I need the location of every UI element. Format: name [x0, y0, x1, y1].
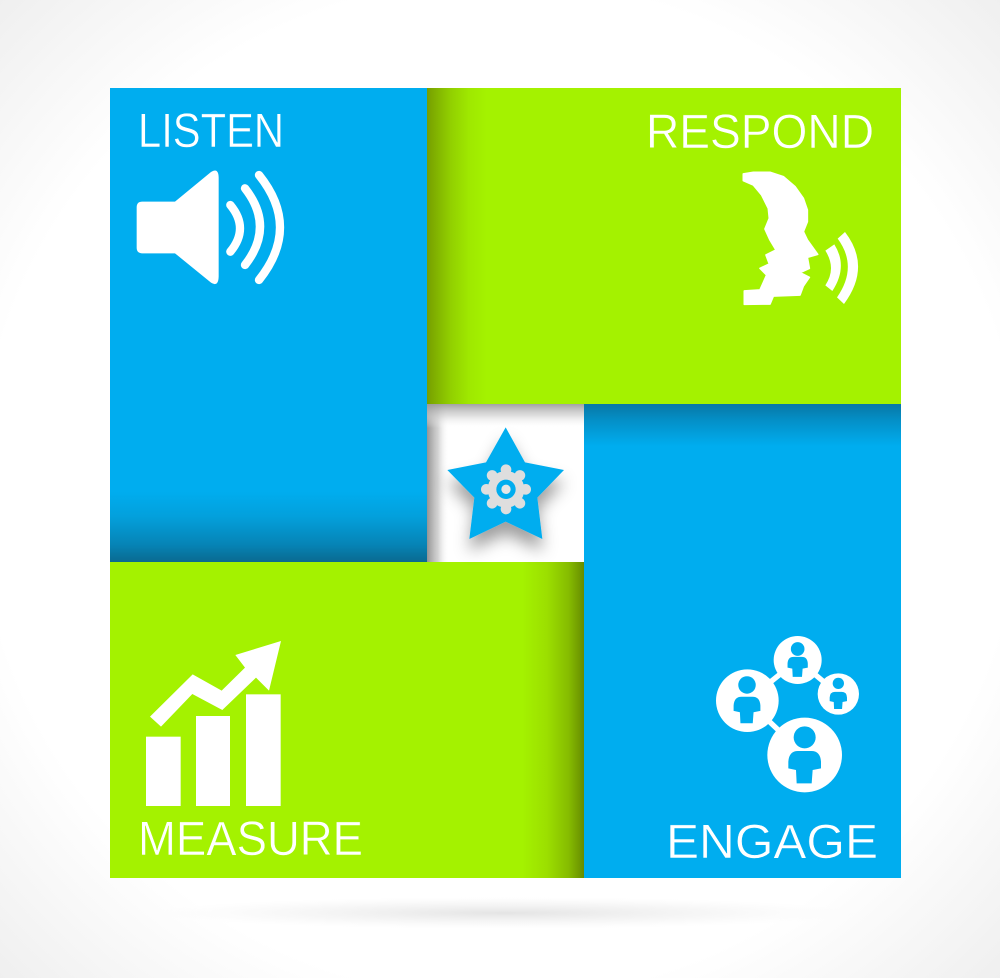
- heading: engage: ENGAGE: [666, 816, 878, 869]
- icon: speaker: [137, 171, 280, 284]
- floor shadow: [155, 897, 855, 929]
- icon: speaking head: [743, 172, 858, 304]
- panel: respond: [427, 88, 901, 404]
- icon: people network: [716, 636, 859, 792]
- heading: listen: LISTEN: [138, 105, 284, 158]
- panel: engage: [110, 404, 901, 878]
- icon: growth chart: [146, 641, 281, 806]
- panel: listen: [110, 88, 427, 562]
- icon: star with gear: [447, 427, 564, 539]
- panel: center: [427, 404, 584, 562]
- heading: respond: RESPOND: [646, 106, 874, 159]
- heading: measure: MEASURE: [138, 813, 363, 866]
- panel: measure: [110, 562, 584, 878]
